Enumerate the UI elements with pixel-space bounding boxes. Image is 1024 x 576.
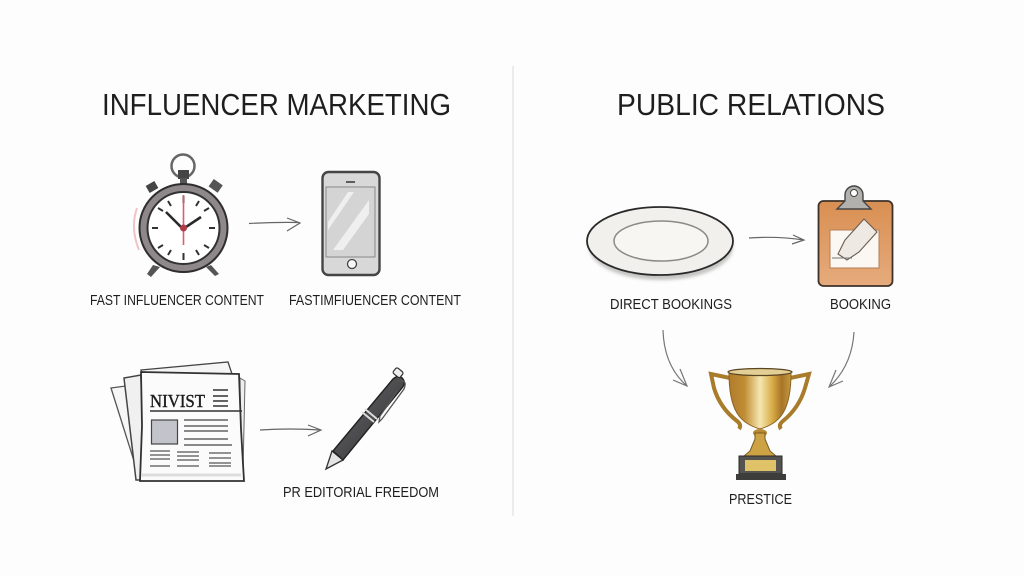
label: pr editorial freedom: PR EDITORIAL FREEDOM [283, 485, 439, 501]
label: direct bookings: DIRECT BOOKINGS [610, 297, 732, 313]
arrow: plate to trophy [663, 330, 687, 386]
icon: plate [587, 207, 733, 280]
icon: newspaper [111, 362, 245, 481]
arrow: booking to trophy [829, 332, 854, 387]
label: fast influencer content: FAST INFLUENCER CONTENT [90, 293, 264, 309]
label: booking: BOOKING [830, 297, 891, 313]
title: influencer marketing: INFLUENCER MARKETING [102, 87, 451, 122]
icon: pen [326, 367, 405, 469]
icon: newspaper: NIVIST [150, 391, 205, 411]
icon: smartphone [322, 172, 380, 275]
icon: trophy [711, 368, 809, 480]
arrow: newspaper to pen [260, 425, 321, 436]
icon: stopwatch clock [134, 154, 228, 277]
label: garbled fast influencer content: FASTIMFIUENCER CONTENT [289, 293, 461, 309]
arrow: plate to booking [749, 235, 804, 244]
title: public relations: PUBLIC RELATIONS [617, 87, 885, 122]
arrow: clock to phone [249, 218, 300, 231]
icon: clipboard [818, 186, 892, 286]
label: prestige: PRESTICE [729, 492, 792, 508]
